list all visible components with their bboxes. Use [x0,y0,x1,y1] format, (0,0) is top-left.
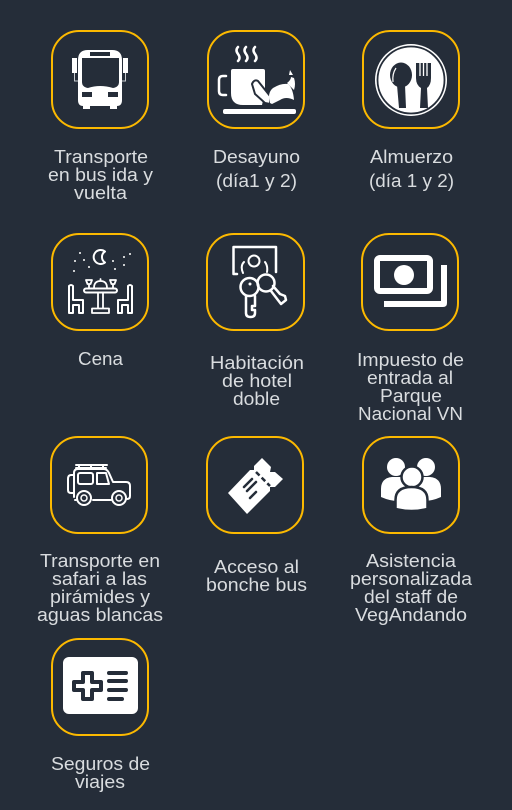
label: transporte safari: pirámides y [50,586,151,607]
label: asistencia: Asistencia [366,550,457,571]
label: impuesto [357,349,464,424]
label: transporte en bus [48,146,154,203]
icon: ticket [228,458,283,514]
label: transporte safari: aguas blancas [37,604,163,625]
item: safari transport [37,437,163,625]
label: impuesto: Parque [380,385,442,406]
label: impuesto: entrada al [367,367,453,388]
icon: people group [381,458,441,511]
label: seguros [51,753,150,792]
label: transporte safari: safari a las [52,568,147,589]
item: lunch [363,31,459,191]
icon box: lunch [363,31,459,128]
label: transporte en bus: vuelta [74,182,128,203]
label: asistencia: VegAndando [355,604,467,625]
item: dinner [52,234,148,369]
icon: medical card [63,657,138,714]
label: asistencia: del staff de [364,586,458,607]
label: almuerzo: Almuerzo [370,146,453,167]
icon box: park tax [362,234,458,330]
label: habitacion: Habitación [210,352,304,373]
item: bonche bus access [206,437,307,595]
icon: night table [69,250,132,313]
label: impuesto: Impuesto de [357,349,464,370]
label: seguros: viajes [75,771,125,792]
label: acceso [206,556,307,595]
label: acceso: Acceso al [214,556,299,577]
icon box: dinner [52,234,148,330]
label: habitacion [210,352,304,409]
label: desayuno: (día1 y 2) [216,170,297,191]
icon: coffee and croissant [219,47,296,114]
icon box: insurance [52,639,148,735]
item: breakfast [208,31,304,191]
label: cena: Cena [78,348,124,369]
icon box: breakfast [208,31,304,128]
label: almuerzo [369,146,454,191]
label: seguros: Seguros de [51,753,150,774]
icon box: ticket [207,437,303,533]
item: bus transport [48,31,154,203]
label: transporte safari [37,550,163,625]
icon: bus [72,50,128,109]
label: habitacion: de hotel [222,370,292,391]
label: transporte en bus: en bus ida y [48,164,154,185]
label: habitacion: doble [233,388,280,409]
icon box: hotel room [207,234,304,330]
label: transporte safari: Transporte en [40,550,160,571]
label: desayuno [213,146,300,191]
label: desayuno: Desayuno [213,146,300,167]
label: acceso: bonche bus [206,574,307,595]
item: park entry tax [357,234,464,424]
label: asistencia [350,550,473,625]
icon: plate with spoon and fork [375,44,447,116]
item: travel insurance [51,639,150,792]
icon box: staff [363,437,459,533]
label: impuesto: Nacional VN [358,403,463,424]
icon box: safari [51,437,147,533]
icon: safari jeep [68,465,130,505]
label: asistencia: personalizada [350,568,473,589]
label: almuerzo: (día 1 y 2) [369,170,454,191]
icon: banknotes [377,258,447,307]
icon: room and keys [234,247,286,317]
label: transporte en bus: Transporte [54,146,148,167]
item: hotel room [207,234,304,409]
icon box: bus [52,31,148,128]
item: staff assistance [350,437,473,625]
